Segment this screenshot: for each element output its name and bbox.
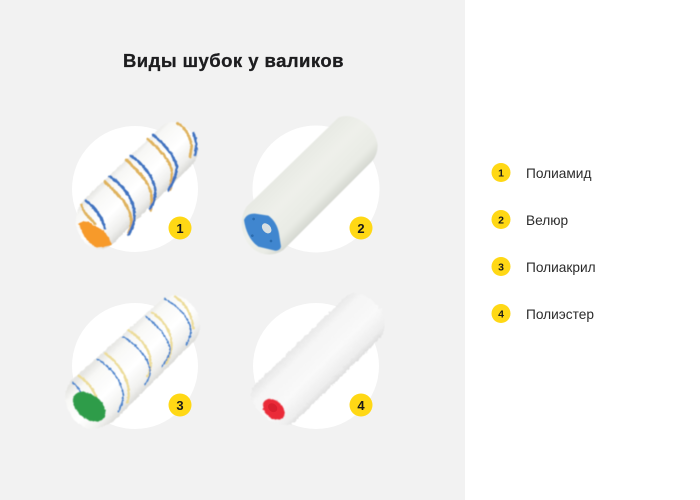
roller 4: polyester: [250, 294, 385, 429]
roller 3: polyacrylic: [65, 295, 200, 429]
legend item 2: [492, 210, 569, 229]
roller 2: velour: [242, 116, 380, 254]
legend item 4: [492, 304, 594, 323]
badge 2: 2: [357, 221, 365, 236]
legend item 3: Полиакрил: [526, 260, 596, 275]
badge 1: [168, 216, 192, 240]
legend item 1: [492, 163, 591, 182]
badge 2: [350, 216, 372, 240]
legend item 2: 2: [498, 214, 504, 226]
legend item 4: 4: [498, 308, 504, 320]
legend item 2: Велюр: [526, 213, 569, 228]
legend item 3: [492, 257, 596, 276]
badge 1: 1: [176, 221, 184, 236]
badge 3: 3: [176, 398, 184, 413]
legend item 3: 3: [498, 261, 504, 273]
badge 4: 4: [357, 398, 365, 413]
legend item 1: Полиамид: [526, 166, 591, 181]
legend item 1: 1: [498, 167, 504, 179]
legend: [492, 163, 596, 323]
title: Виды шубок у валиков: [123, 50, 344, 71]
badge 4: [350, 394, 372, 416]
legend item 4: Полиэстер: [526, 307, 594, 322]
left grey panel: [0, 0, 465, 500]
roller 1: polyamide: [72, 122, 198, 252]
badge 3: [168, 394, 192, 416]
